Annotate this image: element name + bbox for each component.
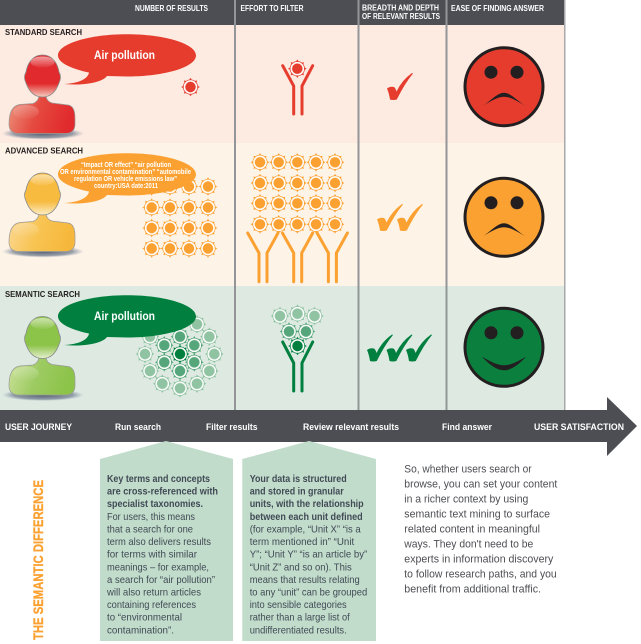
- panel: semantic search row: [0, 286, 564, 410]
- arrow: user journey: Review relevant results: [303, 422, 399, 433]
- callout: structured data: Y”; “Unit Y” “is an article by”: [250, 550, 368, 560]
- callout: structured data: to any “unit” can be grouped: [250, 588, 367, 599]
- panel: standard search row: [0, 25, 564, 143]
- callout: structured data: term mentioned in” “Unit: [250, 537, 354, 548]
- column heading: number of results: NUMBER OF RESULTS: [135, 4, 209, 13]
- icon: sad orange face: [465, 178, 543, 256]
- callout: key terms: will also return articles: [106, 588, 201, 599]
- arrow: user journey: Filter results: [206, 422, 258, 433]
- column heading: breadth and depth: [362, 4, 441, 21]
- icon: filter with one result: [283, 59, 313, 114]
- text block: conclusion: experts in information discovery: [404, 554, 554, 566]
- text block: conclusion: [403, 464, 557, 596]
- arrow: user journey: Find answer: [442, 422, 492, 433]
- icon: filters with many results: [248, 153, 347, 282]
- callout: structured data: undifferentiated results.: [250, 625, 347, 636]
- text block: conclusion: So, whether users search or: [404, 464, 532, 476]
- arrow: user journey: USER JOURNEY: [5, 422, 73, 433]
- row label: semantic search: SEMANTIC SEARCH: [5, 290, 80, 299]
- callout: key terms: to “environmental: [107, 613, 182, 624]
- speech bubble: standard: [58, 34, 196, 85]
- text block: conclusion: browse, you can set your content: [404, 479, 557, 491]
- text block: conclusion: in a richer context by using: [404, 494, 528, 506]
- callout: key terms: meanings – for example,: [107, 562, 209, 574]
- icon: orange user: [2, 173, 84, 258]
- icon: sad red face: [465, 48, 543, 126]
- callout: key terms: Key terms and concepts: [107, 474, 210, 485]
- callout: key terms: a search for “air pollution”: [107, 575, 215, 586]
- vertical heading: the semantic difference: THE SEMANTIC DIFFERENCE: [31, 480, 46, 640]
- text block: conclusion: semantic text mining to surface: [404, 509, 550, 521]
- callout: structured data: units, with the relationship: [250, 499, 364, 510]
- speech bubble: advanced: regulation OR vehicle emissions law”: [74, 174, 177, 183]
- text block: conclusion: related content in meaningful: [404, 524, 540, 536]
- callout: structured data: [242, 441, 376, 641]
- text block: conclusion: benefit from additional traffic.: [404, 584, 541, 596]
- callout: key terms: [100, 441, 233, 641]
- speech bubble: advanced: “Impact OR effect” “air pollution: [81, 160, 171, 169]
- speech bubble: semantic: [58, 295, 196, 346]
- result grid: advanced: [142, 177, 217, 258]
- text block: conclusion: to follow research paths, and you: [404, 569, 557, 581]
- callout: structured data: into sensible categories: [250, 600, 347, 611]
- callout: structured data: “Unit Z” and so on). This: [250, 562, 352, 574]
- speech bubble: semantic: Air pollution: [94, 309, 155, 323]
- header bar: [0, 0, 564, 25]
- callout: key terms: For users, this means: [107, 512, 195, 523]
- column heading: breadth and depth: OF RELEVANT RESULTS: [362, 12, 441, 21]
- callout: key terms: contamination”.: [107, 625, 174, 636]
- text block: conclusion: ways. They don't need to be: [403, 539, 533, 551]
- icon: three check marks: [367, 334, 432, 362]
- arrow: user journey: [0, 397, 637, 456]
- icon: two check marks: [377, 204, 423, 231]
- arrow: user journey: Run search: [115, 422, 161, 433]
- callout: structured data: rather than a large list of: [250, 613, 350, 624]
- callout: key terms: containing references: [107, 600, 196, 611]
- row label: standard search: STANDARD SEARCH: [5, 28, 82, 37]
- panel: advanced search row: [0, 143, 564, 286]
- callout: structured data: Your data is structured: [250, 474, 347, 485]
- callout: structured data: means that results relating: [250, 575, 360, 586]
- arrow: user journey: USER SATISFACTION: [534, 422, 624, 433]
- callout: structured data: (for example, “Unit X” “is a: [250, 524, 361, 536]
- column heading: ease of finding answer: EASE OF FINDING ANSWER: [451, 4, 544, 13]
- callout: key terms: term also delivers results: [107, 537, 211, 548]
- callout: key terms: that a search for one: [107, 524, 193, 536]
- icon: filter with relevant results: [271, 304, 324, 391]
- icon: red user: [2, 55, 84, 140]
- row label: advanced search: ADVANCED SEARCH: [5, 146, 83, 156]
- callout: key terms: for terms with similar: [107, 550, 198, 560]
- callout: structured data: and stored in granular: [250, 487, 344, 498]
- icon: single result: [181, 78, 200, 96]
- callout: key terms: are cross-referenced with: [107, 487, 218, 498]
- callout: structured data: between each unit defined: [250, 512, 363, 523]
- icon: one check mark: [387, 73, 413, 100]
- column heading: effort to filter: EFFORT TO FILTER: [240, 4, 304, 13]
- column heading: breadth and depth: BREADTH AND DEPTH: [362, 4, 439, 12]
- speech bubble: advanced: country:USA date:2011: [94, 181, 158, 190]
- result cluster: semantic: [136, 315, 224, 398]
- speech bubble: advanced: OR environmental contamination” “automobile: [60, 167, 191, 176]
- speech bubble: standard: Air pollution: [94, 48, 155, 62]
- callout: key terms: specialist taxonomies.: [107, 499, 203, 510]
- speech bubble: advanced: [58, 153, 196, 204]
- icon: happy green face: [465, 308, 543, 386]
- icon: green user: [2, 316, 84, 401]
